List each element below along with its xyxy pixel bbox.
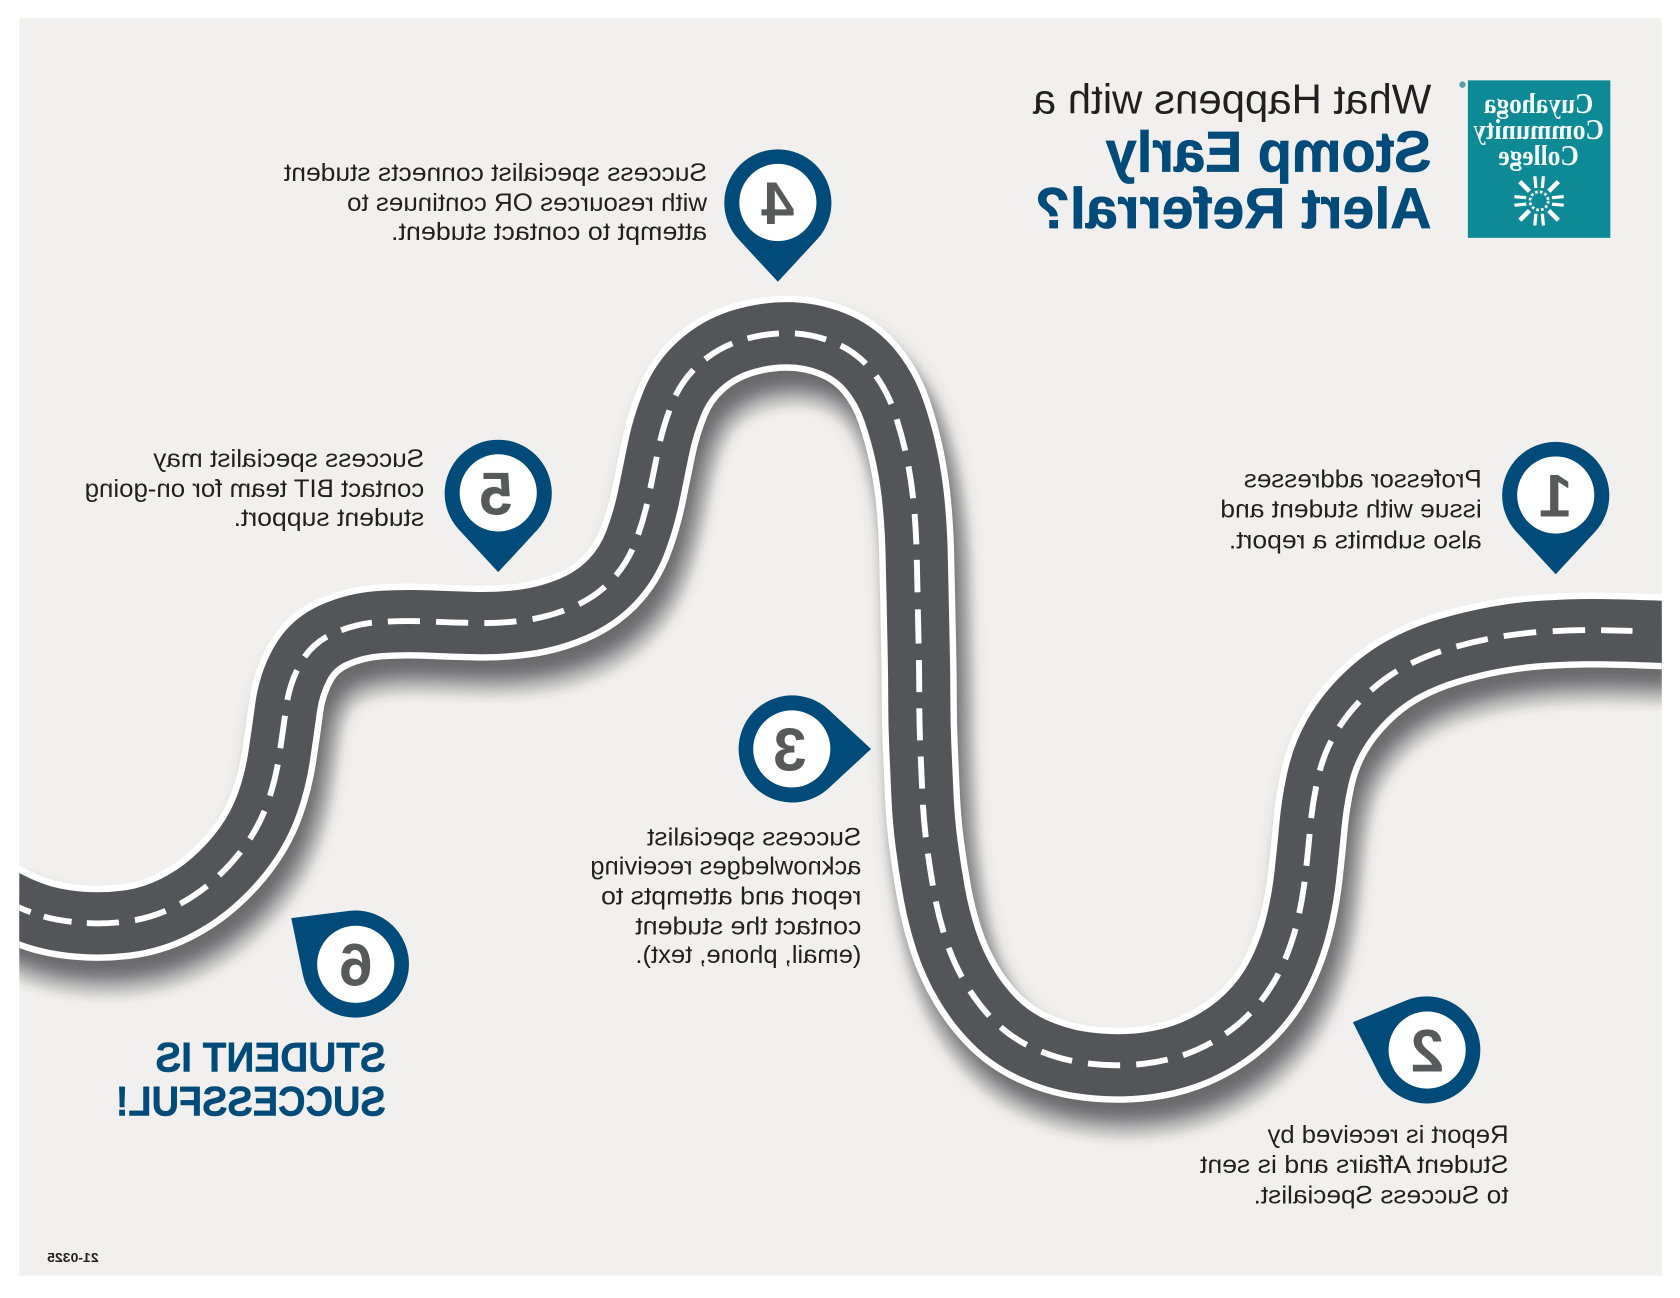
step 3 text: report and attempts to xyxy=(601,882,861,910)
step 4 text: with resources OR continues to xyxy=(347,189,708,217)
step 2 text: to Success Specialist. xyxy=(1254,1181,1509,1209)
title: Alert Referral? xyxy=(1035,177,1431,241)
step 6 text: SUCCESSFUL! xyxy=(116,1077,386,1124)
step 1 text: issue with student and xyxy=(1220,496,1482,524)
pin 2 xyxy=(1334,972,1496,1119)
logo: Cuyahoga Community College xyxy=(1459,80,1610,238)
step 3 text: acknowledges receiving xyxy=(590,852,861,880)
pin 2: 2 xyxy=(1410,1017,1444,1084)
step 2 text: Student Affairs and is sent xyxy=(1200,1151,1509,1179)
logo: Cuyahoga Community College: College xyxy=(1498,140,1579,172)
logo: Cuyahoga Community College: Cuyahoga xyxy=(1483,88,1593,120)
step 6 text: STUDENT IS xyxy=(155,1033,386,1080)
step 1 text: also submits a report. xyxy=(1229,527,1482,555)
step 3 text xyxy=(590,823,861,969)
pin 4: 4 xyxy=(761,170,795,237)
pin 6 xyxy=(260,875,430,1039)
pin 1 xyxy=(1502,442,1609,574)
title: Stomp Early xyxy=(1106,120,1431,184)
step 6 text xyxy=(116,1033,386,1124)
title: What Happens with a xyxy=(1033,77,1431,123)
step 1 text xyxy=(1220,466,1482,555)
pin 5 xyxy=(445,440,552,572)
pin 3: 3 xyxy=(773,716,806,783)
step 4 text xyxy=(284,159,708,246)
pin 1: 1 xyxy=(1539,462,1572,529)
step 1 text: Professor addresses xyxy=(1244,466,1482,494)
step 3 text: Success specialist xyxy=(647,823,861,851)
step 3 text: (email, phone, text). xyxy=(635,941,861,969)
step 4 text: Success specialist connects student xyxy=(284,159,707,187)
document code: 21-0325 xyxy=(47,1250,99,1265)
pin 6: 6 xyxy=(339,932,372,999)
step 5 text: Success specialist may xyxy=(153,445,424,473)
step 4 text: attempt to contact student. xyxy=(391,218,707,246)
pin 4 xyxy=(724,149,831,282)
step 2 text xyxy=(1200,1121,1509,1209)
pin 5: 5 xyxy=(479,460,513,527)
title xyxy=(1033,77,1431,241)
step 3 text: contact the student xyxy=(635,912,861,940)
winding road xyxy=(0,333,1680,1094)
step 2 text: Report is received by xyxy=(1267,1121,1509,1149)
pin 3 xyxy=(739,695,871,803)
step 5 text xyxy=(85,445,424,532)
step 5 text: contact BIT team for on-going xyxy=(85,475,424,503)
step 5 text: student support. xyxy=(234,504,424,532)
logo: Cuyahoga Community College: Community xyxy=(1473,114,1604,146)
